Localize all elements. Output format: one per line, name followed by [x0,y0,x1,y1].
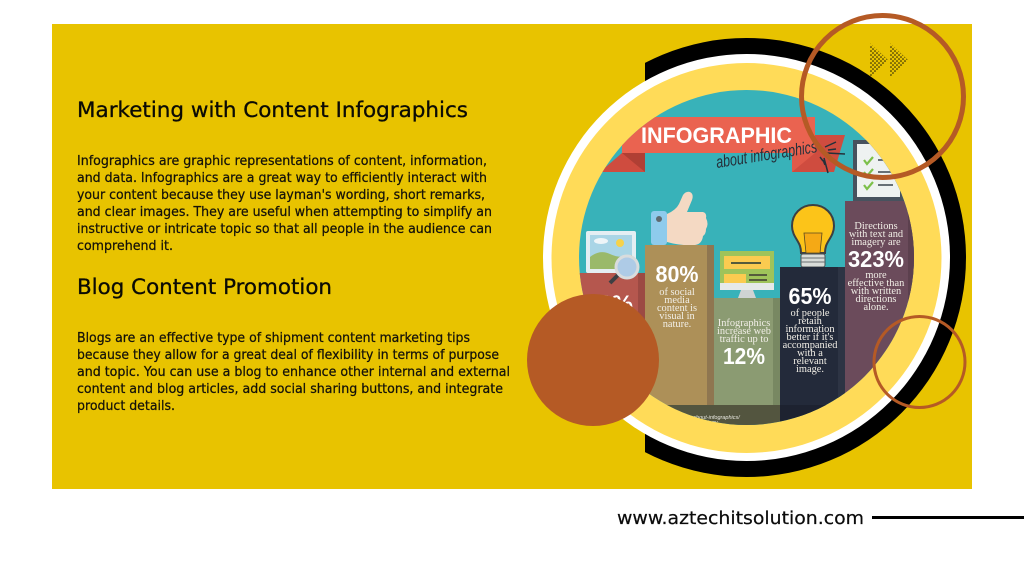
column: tan 80%: of social [659,287,695,298]
column: green 12%: increase web [717,326,771,337]
icon: clipboard [853,140,904,201]
text block: infographics description: Infographics are graphic representations of content, information, [77,154,487,169]
text block: blog description: because they allow for a great deal of flexibility in terms of purpose [77,348,499,363]
column: dark 65%: information [785,324,835,335]
column: tan 80%: visual in [659,311,696,322]
black ring arc [645,38,966,477]
panel: yellow background [52,24,972,489]
source band [667,405,826,425]
large rust ring [802,16,964,178]
infographic image in circle [570,85,920,431]
column: red [580,273,645,320]
column: purple 323%: with text and [849,229,904,240]
icon: picture with magnifier [586,231,636,273]
column: purple 323%: Directions [854,221,898,232]
column: purple 323%: effective than [848,278,905,289]
icon: magnifier [610,256,638,283]
column: dark 65%: retain [798,316,823,327]
column: red: 62% [585,291,633,318]
column: dark 65%: of people [791,308,830,319]
text block: blog description [77,331,510,414]
column: dark 65%: better if it's [787,332,833,343]
ribbon banner: INFOGRAPHIC [641,123,792,148]
column: green 12%: traffic up to [720,334,768,345]
column: dark 65%: accompanied [783,340,838,351]
footer line [872,516,1024,519]
footer: website url: www.aztechitsolution.com [617,509,864,529]
text block: infographics description: instructive or intricate topic so that all people in the audience can [77,222,492,237]
filled rust circle [527,294,659,426]
text block: blog description: content and blog articles, add social sharing buttons, and integrate [77,382,503,397]
column: green 12% [714,298,780,415]
ribbon banner [600,117,845,173]
ribbon banner: about infographics [715,137,819,172]
text block: blog description: and topic. You can use a blog to enhance other internal and external [77,365,510,380]
column: tan 80% [645,245,714,415]
column: green 12%: Infographics [718,318,770,329]
column: dark 65%: image. [796,364,824,375]
column: purple 323%: alone. [863,302,889,313]
source band: about-infographics/ [693,415,740,421]
column: purple 323%: 323% [848,246,904,272]
column: dark 65%: 65% [788,283,832,309]
yellow ring [552,63,942,453]
icon: thumbs up [651,192,708,245]
text block: blog description: product details. [77,399,175,414]
icon: monitor [720,251,774,298]
column: dark 65%: relevant [793,356,827,367]
text block: infographics description: comprehend it. [77,239,173,254]
heading: Blog Content Promotion: Blog Content Promotion [77,275,332,299]
column: tan 80%: nature. [663,319,691,330]
text block: infographics description: and clear images. They are useful when attempting to simplify an [77,205,492,220]
column: purple 323%: more [865,270,887,281]
column: green 12%: 12% [723,343,765,369]
column: purple 323% [845,201,914,393]
text block: infographics description [77,154,492,254]
source band: strategy [698,420,719,426]
icon: light bulb [792,205,834,267]
column: purple 323%: directions [856,294,896,305]
column: tan 80%: content is [657,303,697,314]
column: purple 323%: with written [851,286,902,297]
column: purple 323%: imagery are [851,237,901,248]
small rust ring [874,316,965,408]
white ring [543,54,950,461]
column: tan 80%: 80% [656,261,699,287]
heading: Marketing with Content Infographics: Marketing with Content Infographics [77,98,468,122]
column: dark 65%: with a [797,348,823,359]
text block: blog description: Blogs are an effective type of shipment content marketing tips [77,331,470,346]
column: tan 80%: media [664,295,690,306]
text block: infographics description: and data. Infographics are a great way to efficiently interact with [77,171,487,186]
text block: infographics description: your content because they use layman's wording, short remarks, [77,188,485,203]
icon: dotted double arrow [870,43,908,77]
column: dark 65% [780,267,845,417]
